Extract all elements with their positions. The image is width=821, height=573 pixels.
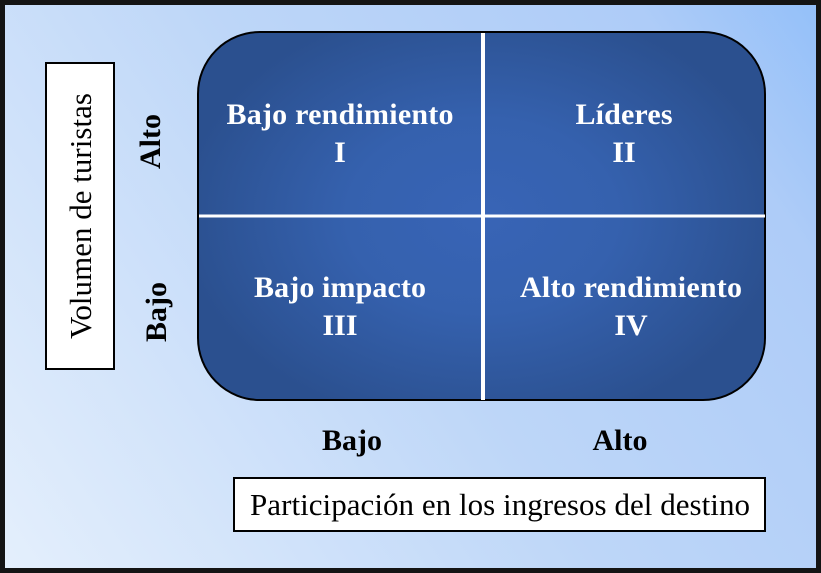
quadrant I: I — [334, 136, 346, 169]
quadrant IV: Alto rendimiento — [520, 271, 742, 304]
quadrant II: II — [612, 136, 636, 169]
x-axis title box — [234, 478, 765, 531]
y-axis label: Bajo: Bajo — [140, 282, 173, 342]
x-axis title box: Participación en los ingresos del destino — [250, 487, 750, 522]
y-axis title box: Volumen de turistas — [63, 93, 98, 339]
quadrant III — [254, 271, 426, 342]
y-axis title box — [46, 63, 114, 369]
panel: quadrant matrix — [198, 32, 765, 400]
quadrant IV — [520, 271, 742, 342]
quadrant III: III — [322, 309, 358, 342]
x-axis label: Alto: Alto — [592, 424, 648, 457]
quadrant III: Bajo impacto — [254, 271, 426, 304]
x-axis label: Bajo: Bajo — [322, 424, 382, 457]
y-axis label: Alto: Alto — [134, 114, 167, 169]
quadrant II: Líderes — [576, 98, 672, 131]
quadrant II — [576, 98, 672, 169]
quadrant I — [226, 98, 454, 169]
quadrant I: Bajo rendimiento — [226, 98, 454, 131]
quadrant IV: IV — [614, 309, 648, 342]
